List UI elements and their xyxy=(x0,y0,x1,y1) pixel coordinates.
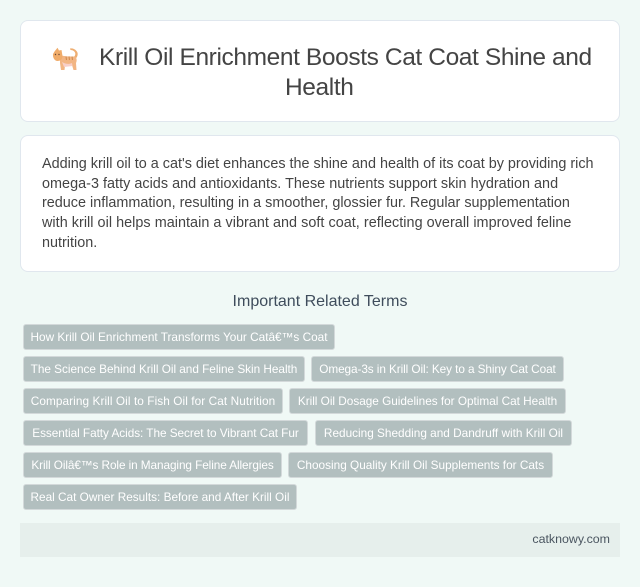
tag: How Krill Oil Enrichment Transforms Your Catâ€™s Coat xyxy=(30,330,328,344)
tag xyxy=(23,452,282,478)
tag: Comparing Krill Oil to Fish Oil for Cat Nutrition xyxy=(31,394,275,408)
tag xyxy=(23,484,297,510)
tag: Krill Oil Dosage Guidelines for Optimal Cat Health xyxy=(298,394,557,408)
tag xyxy=(23,388,283,414)
icon: cat xyxy=(52,48,78,70)
footer bar xyxy=(20,523,620,557)
description text: reduce inflammation, resulting in a smoother, glossier fur. Regular supplementation xyxy=(42,195,570,211)
tag: Omega-3s in Krill Oil: Key to a Shiny Cat Coat xyxy=(319,362,556,376)
panel: description xyxy=(20,135,620,272)
description text xyxy=(42,156,594,251)
tag: Real Cat Owner Results: Before and After Krill Oil xyxy=(30,490,289,504)
title: Health xyxy=(285,74,353,101)
tag xyxy=(289,388,566,414)
tag xyxy=(23,356,305,382)
tag xyxy=(315,420,572,446)
heading: important related terms: Important Related Terms xyxy=(233,293,407,310)
tag xyxy=(23,324,335,350)
title: Krill Oil Enrichment Boosts Cat Coat Shine and xyxy=(99,44,592,71)
title xyxy=(99,44,592,101)
description text: with krill oil helps maintain a vibrant and soft coat, reflecting overall improved feline xyxy=(42,215,571,231)
tag: Choosing Quality Krill Oil Supplements for Cats xyxy=(297,458,544,472)
tag: Reducing Shedding and Dandruff with Krill Oil xyxy=(324,426,563,440)
description text: Adding krill oil to a cat's diet enhances the shine and health of its coat by providing rich xyxy=(42,156,594,172)
footer site name: catknowy.com xyxy=(532,532,610,546)
tag xyxy=(23,420,308,446)
description text: nutrition. xyxy=(42,235,97,251)
panel: title card xyxy=(20,20,620,122)
tag xyxy=(288,452,553,478)
tag: The Science Behind Krill Oil and Feline Skin Health xyxy=(31,362,297,376)
description text: omega-3 fatty acids and antioxidants. These nutrients support skin hydration and xyxy=(42,176,558,192)
tag: Essential Fatty Acids: The Secret to Vibrant Cat Fur xyxy=(32,426,299,440)
tag xyxy=(311,356,564,382)
related terms tags xyxy=(23,324,572,510)
tag: Krill Oilâ€™s Role in Managing Feline Allergies xyxy=(31,458,274,472)
